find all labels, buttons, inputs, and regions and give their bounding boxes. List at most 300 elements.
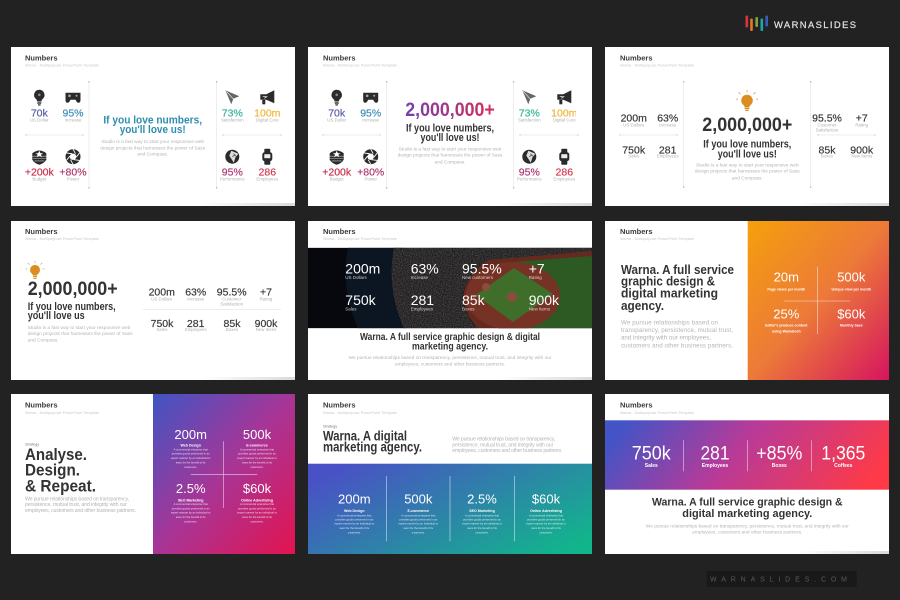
slide 6 headline: graphic design &	[621, 274, 715, 289]
slide 7 headline: Analyse.	[25, 445, 87, 464]
slide 3 title: Numbers	[620, 54, 653, 63]
footer url badge: WARNASLIDES.COM	[710, 576, 847, 584]
slide 3 body text: and Compass.	[732, 175, 763, 181]
service: E-commerce: provides goods performed in an	[238, 452, 276, 456]
slide 4 headline: If you love numbers,	[28, 301, 116, 313]
stat: 95% performance: 95%	[222, 167, 243, 179]
stat: 900k: 900k	[850, 144, 874, 156]
stat: 750k: 750k	[345, 292, 377, 308]
stat: 500k: Unique view per month	[832, 288, 871, 292]
stat: +85%: +85%	[756, 444, 802, 465]
slide 2: icon stats with gradient number	[308, 47, 592, 206]
strategy kicker: Strategy	[323, 425, 337, 429]
stat: 286: 286	[259, 167, 276, 179]
slide 4 subtitle: Warna - Multipurpose PowerPoint Template	[25, 237, 99, 241]
service: Online Advertising: $60k	[243, 481, 272, 496]
slide 2 body text	[398, 147, 503, 165]
slide 8 body text: We pursue relationships based on transparency,	[452, 436, 555, 442]
service: SEO Marketing: SEO Marketing	[469, 509, 495, 513]
stat: 95% performance: 95%	[519, 167, 540, 179]
slide 6 headline	[621, 262, 734, 313]
slide 8 title: Numbers	[323, 401, 356, 410]
slide 9 headline	[652, 496, 843, 520]
service: E-commerce: provides goods performed in an	[399, 518, 438, 522]
stat: 95%: 95%	[360, 108, 381, 120]
slide 5 title: Numbers	[323, 227, 356, 236]
slide 2 body text: Studio is a fast way to start your responsive web	[399, 147, 502, 153]
stat: 85k: Boxes	[821, 153, 834, 158]
stat: $60k: Monthly base	[840, 323, 863, 327]
stat: 20m: 20m	[774, 270, 799, 285]
service: Online Advertising: customers.	[539, 530, 553, 534]
stat: +80%	[59, 149, 87, 182]
red gradient band	[605, 420, 889, 490]
slide 9 body text: employees, customers and other business partners.	[692, 529, 802, 535]
slide 7 headline: Design.	[25, 461, 80, 480]
slide 3 body text: Studio is a fast way to start your responsive web	[696, 163, 799, 169]
stat: +200k: Budget	[32, 177, 47, 182]
service: E-commerce: team for the benefit of its	[404, 526, 434, 530]
slide 4 body text: Studio is a fast way to start your responsive web	[28, 325, 131, 331]
stat: 286	[256, 149, 279, 182]
slide 6 subtitle: Warna - Multipurpose PowerPoint Template	[620, 237, 694, 241]
service: E-commerce: team for the benefit of its	[242, 460, 272, 464]
slide 1 dividers	[26, 81, 282, 188]
stadium photo	[308, 248, 592, 330]
slide 2 dividers	[322, 81, 578, 188]
slide 2 body text: design projects that harnesses the power of Sass	[398, 153, 503, 159]
service: E-commerce: expert manner by an individual or	[398, 522, 438, 526]
service: SEO Marketing: team for the benefit of its	[467, 526, 497, 530]
stat: 95.5%: Customer	[817, 122, 837, 127]
service: E-commerce: E-commerce	[408, 509, 429, 513]
service: Web Design: team for the benefit of its	[340, 526, 370, 530]
slide 3 headline: If you love numbers,	[703, 139, 791, 151]
stat: 200m: 200m	[621, 113, 647, 125]
service: SEO Marketing: SEO Marketing	[178, 498, 203, 502]
stat: 85k: 85k	[462, 292, 486, 308]
stat: 281	[657, 144, 679, 158]
brand logo	[746, 16, 856, 31]
service: SEO Marketing: customers.	[184, 520, 198, 524]
slide 5 body text: We pursue relationships based on transparency, persistence, mutual trust, and integrity with our	[348, 355, 552, 361]
stat: 95% performance: Performance	[517, 177, 542, 182]
service: E-commerce: A commercial enterprise that	[240, 448, 274, 452]
slide 7 body text	[25, 496, 136, 514]
stat: 1,365: Coffees	[834, 463, 853, 469]
slide 8 body text: persistence, mutual trust, and integrity with our	[452, 442, 554, 448]
service: E-commerce: 500k	[404, 492, 433, 507]
purple gradient panel	[153, 394, 295, 554]
service: SEO Marketing: 2.5%	[176, 481, 206, 496]
slide 9 subtitle: Warna - Multipurpose PowerPoint Template	[620, 411, 694, 415]
service: Web Design: team for the benefit of its	[176, 460, 206, 464]
stat: 70k: 70k	[31, 108, 49, 120]
stat: 500k	[832, 270, 871, 292]
stat: +200k: +200k	[25, 167, 54, 179]
stat: 70k: US Dollar	[30, 118, 49, 123]
stat: 100m	[254, 90, 281, 123]
stat: 286: 286	[556, 167, 573, 179]
panel cross dividers	[191, 441, 257, 508]
stat: 20m	[767, 270, 805, 292]
slide 5 body text: employees, customers and other business partners.	[395, 362, 505, 368]
stat: 63%: Increase	[411, 275, 428, 280]
slide 2 headline: you'll love us!	[420, 132, 480, 144]
stat: 900k: New Items	[529, 307, 551, 312]
service: Online Advertising: team for the benefit of its	[531, 526, 561, 530]
slide 5 subtitle: Warna - Multipurpose PowerPoint Template	[323, 237, 397, 241]
teal gradient band	[308, 464, 592, 554]
service: Online Advertising: team for the benefit of its	[242, 515, 272, 519]
service: E-commerce: E-commerce	[246, 444, 268, 448]
service: Online Advertising	[237, 481, 277, 524]
stat: 73%	[518, 90, 541, 123]
big dark number: 2,000,000+	[702, 115, 792, 136]
service: SEO Marketing: provides goods performed in an	[172, 506, 210, 510]
service: SEO Marketing: expert manner by an individual or	[171, 511, 211, 515]
service: SEO Marketing: A commercial enterprise that	[465, 514, 499, 518]
slide 5: stadium photo band	[308, 221, 592, 380]
big gradient number: 2,000,000+	[405, 100, 495, 121]
stat: 100m: 100m	[254, 108, 281, 120]
stat: 750k: 750k	[151, 318, 174, 330]
slide 8 body text	[452, 436, 562, 454]
stat: 500k: 500k	[837, 270, 866, 285]
band dividers	[386, 476, 514, 541]
stat: +80%	[357, 149, 384, 182]
slide 4 title: Numbers	[25, 227, 58, 236]
stat: 100m: Digital Core	[256, 118, 279, 123]
slide 1 body text: and Compass.	[137, 152, 168, 158]
slide 1 subtitle: Warna - Multipurpose PowerPoint Template	[25, 64, 99, 68]
stat: 73%: 73%	[519, 108, 540, 120]
slide 2 subtitle: Warna - Multipurpose PowerPoint Template	[323, 64, 397, 68]
stat: 281: Employees	[411, 307, 434, 312]
slide 7 headline	[25, 445, 96, 495]
slide 6: orange gradient panel	[605, 221, 889, 380]
slide 2 headline	[406, 123, 494, 144]
stat: +7: +7	[260, 286, 272, 298]
stat: 95%: Increase	[362, 118, 380, 123]
slide 8 body text: employees, customers and other business partners.	[452, 448, 562, 454]
slide 8 subtitle: Warna - Multipurpose PowerPoint Template	[323, 411, 397, 415]
stat: 100m: 100m	[551, 108, 578, 120]
slide 7 body text: We pursue relationships based on transparency,	[25, 496, 129, 502]
stat: 70k: 70k	[328, 108, 346, 120]
service: SEO Marketing: provides goods performed in an	[463, 518, 501, 522]
slide 6 body text: customers and other business partners.	[621, 342, 733, 349]
slide 2 title: Numbers	[323, 54, 356, 63]
icon: orange light bulb	[26, 261, 44, 279]
stat: +80%: Power	[364, 177, 377, 182]
slide 7 body text: employees, customers and other business partners.	[25, 508, 136, 514]
slide 4 body text	[28, 325, 133, 343]
stat: 73%	[221, 90, 244, 123]
stat: +80%: +80%	[357, 167, 384, 179]
service: Online Advertising: $60k	[532, 492, 561, 507]
slide 4 headline	[28, 301, 116, 322]
slide 6 headline: Warna. A full service	[621, 262, 734, 277]
stat: 95.5%: 95.5%	[462, 260, 502, 276]
stat: 95%	[62, 93, 84, 123]
slide 8: teal gradient band	[308, 394, 592, 554]
stat: 95.5%	[812, 113, 842, 132]
stat: +200k: Budget	[330, 177, 344, 182]
service: E-commerce: 500k	[243, 427, 272, 442]
footer url badge	[707, 571, 857, 587]
slide 2 headline: If you love numbers,	[406, 123, 494, 135]
icon: orange light bulb	[736, 90, 758, 111]
slide 6 body text: and integrity with our employees,	[621, 335, 711, 342]
stat: 750k: Sales	[628, 153, 640, 158]
service: Web Design: A commercial enterprise that	[174, 448, 208, 452]
slide 5 body text	[348, 355, 552, 368]
service: SEO Marketing: team for the benefit of its	[176, 515, 206, 519]
service: Web Design: provides goods performed in an	[172, 452, 210, 456]
stat: +80%: +80%	[59, 167, 87, 179]
slide 6 title: Numbers	[620, 227, 653, 236]
stat: 73%: 73%	[222, 108, 243, 120]
stat: 63%: 63%	[411, 260, 439, 276]
service: Online Advertising: A commercial enterprise that	[240, 502, 274, 506]
stat: 25%: Editor's produce content	[765, 323, 808, 327]
service: Web Design: provides goods performed in an	[335, 518, 374, 522]
stat: 25%: 25%	[773, 306, 800, 321]
slide 1 headline: you'll love us!	[120, 124, 186, 136]
slide 3 subtitle: Warna - Multipurpose PowerPoint Template	[620, 64, 694, 68]
service: Web Design: Web Design	[344, 509, 365, 513]
stat: 281: 281	[411, 292, 434, 308]
stat: 63%: Increase	[659, 122, 677, 127]
stat: 200m: US Dollars	[623, 122, 645, 127]
stat: 281	[185, 318, 207, 332]
stat: 95%: 95%	[62, 108, 84, 120]
slide 8 headline	[323, 428, 422, 454]
stat: 70k: US Dollar	[327, 118, 347, 123]
slide 4 body text: and Compass.	[28, 337, 59, 343]
stat: +7: Rating	[260, 296, 273, 301]
orange gradient panel	[748, 221, 889, 380]
stat: 281: 281	[187, 318, 205, 330]
service: Web Design: 200m	[174, 427, 207, 442]
slide 7 body text: persistence, mutual trust, and integrity with our	[25, 502, 127, 508]
stat: +85%: Boxes	[772, 463, 787, 469]
stat: 85k: Boxes	[462, 307, 475, 312]
stat: 281: 281	[659, 144, 677, 156]
slide 7 subtitle: Warna - Multipurpose PowerPoint Template	[25, 411, 99, 415]
stat: $60k: $60k	[837, 306, 866, 321]
stat: 200m: US Dollars	[151, 296, 173, 301]
stat: 281: Employees	[185, 327, 207, 332]
slide 1: icon stats with teal headline	[11, 47, 295, 206]
slide 3 body text	[695, 163, 800, 181]
stat: 25%	[765, 306, 808, 333]
stat: 85k: 85k	[819, 144, 836, 156]
strategy kicker: Strategy	[25, 442, 39, 446]
slide 9: red gradient band	[605, 394, 889, 554]
service: SEO Marketing: A commercial enterprise that	[174, 502, 208, 506]
service: E-commerce	[237, 427, 277, 469]
stat: 750k: 750k	[632, 444, 671, 465]
slide 6 body text: We pursue relationships based on	[621, 319, 719, 326]
stat: 63%: 63%	[657, 113, 678, 125]
stat: 750k: Sales	[645, 463, 658, 469]
stat: +7: Rating	[855, 122, 869, 127]
service: Online Advertising: Online Advertising	[241, 498, 273, 502]
stat: 750k: Sales	[157, 327, 168, 332]
stat: 200m: 200m	[345, 260, 380, 276]
stat: 95% performance	[220, 150, 245, 182]
stat: 85k: Boxes	[226, 327, 239, 332]
stat: 900k: New Items	[256, 327, 277, 332]
stat: 95.5%: Satisfaction	[816, 127, 839, 132]
stat: 95.5%: 95.5%	[217, 286, 247, 298]
stat: 95.5%: New customers	[462, 275, 494, 280]
service: E-commerce: expert manner by an individual or	[237, 456, 277, 460]
stat: 750k: 750k	[622, 144, 646, 156]
stat: 95.5%: Customer	[222, 296, 242, 301]
stat: +200k	[322, 150, 352, 182]
stat: 73%: Satisfaction	[518, 118, 541, 123]
service: SEO Marketing	[462, 492, 502, 534]
stat: 750k: Sales	[345, 307, 357, 312]
slide 3 dividers	[620, 81, 876, 188]
stat: 900k: New Items	[851, 153, 873, 158]
service: E-commerce	[398, 492, 438, 534]
brand logo: WARNASLIDES	[774, 19, 856, 30]
slide 7 headline: & Repeat.	[25, 476, 96, 495]
slide 3 body text: design projects that harnesses the power of Sass	[695, 169, 800, 175]
band dividers	[683, 440, 811, 471]
stat: 281: Employees	[702, 463, 728, 469]
slide 9 body text	[646, 523, 849, 535]
stat: +7: +7	[529, 260, 545, 276]
service: E-commerce: customers.	[250, 465, 264, 469]
stat: 95%: Increase	[65, 118, 82, 123]
panel cross dividers	[784, 267, 850, 334]
slide 7: purple gradient panel	[11, 394, 295, 554]
service: Web Design: A commercial enterprise that	[337, 514, 372, 518]
slide 4 body text: design projects that harnesses the power of Sass	[28, 331, 133, 337]
stat: 70k	[30, 90, 49, 123]
stat: +200k	[25, 150, 54, 182]
stat: 95.5%	[217, 286, 247, 306]
slide 1 headline: If you love numbers,	[103, 114, 202, 126]
stat: 286	[553, 149, 576, 182]
stat: +200k: +200k	[322, 167, 352, 179]
stat: 100m	[551, 90, 578, 123]
stat: 100m: Digital Core	[553, 118, 576, 123]
slide 9 headline: Warna. A full service graphic design &	[652, 496, 843, 508]
stat: 200m: US Dollars	[345, 275, 368, 280]
service: Online Advertising: expert manner by an individual or	[526, 522, 566, 526]
stat: 63%: Increase	[187, 296, 205, 301]
stat: +80%: Power	[67, 177, 80, 182]
slide 9 body text: We pursue relationships based on transparency, persistence, mutual trust, and integrity with our	[646, 523, 849, 529]
stat: 286: Employees	[553, 177, 576, 182]
slide 1 headline	[103, 114, 202, 136]
stat: 900k: 900k	[529, 292, 560, 308]
stat: 95.5%: Satisfaction	[220, 301, 244, 306]
slide 9 headline: digital marketing agency.	[682, 508, 812, 520]
slide 6 body text: transparency, persistence, mutual trust,	[621, 327, 733, 334]
slide 6 headline: digital marketing	[621, 286, 718, 301]
slide 6 headline: agency.	[621, 298, 664, 313]
stat: 95% performance: Performance	[220, 177, 245, 182]
stat: 73%: Satisfaction	[221, 118, 244, 123]
slide 3 headline	[703, 139, 791, 160]
stat: 95%	[360, 93, 381, 123]
slide 3: centered bulb and number stats	[605, 47, 889, 206]
slide 5 headline	[360, 332, 540, 352]
slide 9 title: Numbers	[620, 401, 653, 410]
slide 7 title: Numbers	[25, 401, 58, 410]
stat: 63%: 63%	[185, 286, 206, 298]
slide 3 headline: you'll love us!	[718, 148, 777, 160]
stat: 95% performance	[517, 150, 542, 182]
stat: 25%: using Warnatech	[772, 329, 801, 333]
slide 8 headline: marketing agency.	[323, 438, 422, 454]
big dark number: 2,000,000+	[28, 279, 118, 300]
service: Web Design: expert manner by an individual or	[171, 456, 211, 460]
service: Web Design: customers.	[348, 530, 361, 534]
stat: 70k	[327, 90, 347, 123]
slide 1 body text	[100, 139, 206, 158]
stat: 281: Employees	[657, 153, 679, 158]
service: SEO Marketing: expert manner by an individual or	[462, 522, 502, 526]
slide 1 title: Numbers	[25, 54, 58, 63]
service: Online Advertising: Online Advertising	[530, 509, 562, 513]
service: Online Advertising	[526, 492, 566, 534]
service: Online Advertising: A commercial enterprise that	[529, 514, 563, 518]
slide 4: left number with stat row	[11, 221, 295, 380]
service: Web Design: customers.	[184, 465, 198, 469]
stat: +7: Rating	[529, 275, 542, 280]
service: Web Design: 200m	[338, 492, 371, 507]
slide 6 body text	[621, 319, 733, 349]
stat: +7: +7	[856, 113, 868, 125]
service: Web Design: expert manner by an individual or	[334, 522, 374, 526]
stat: 900k: 900k	[255, 318, 278, 330]
slide 4 headline: you'll love us	[28, 310, 85, 322]
stat: 95.5%: 95.5%	[812, 113, 842, 125]
slide 8 headline: Warna. A digital	[323, 428, 407, 444]
stat: 20m: Page views per month	[767, 288, 805, 292]
service: Online Advertising: provides goods performed in an	[527, 518, 565, 522]
slide 2 body text: and Compass.	[435, 159, 465, 165]
service: Web Design: Web Design	[180, 444, 201, 448]
service: Online Advertising: expert manner by an individual or	[237, 511, 277, 515]
stat: 281: 281	[700, 444, 730, 465]
service: Web Design	[171, 427, 211, 469]
service: SEO Marketing: 2.5%	[467, 492, 497, 507]
stat: 85k: 85k	[224, 318, 241, 330]
stat: 1,365: 1,365	[821, 444, 865, 465]
service: Online Advertising: provides goods performed in an	[238, 506, 276, 510]
slide 1 body text: Studio is a fast way to start your responsive web	[101, 139, 204, 145]
service: Online Advertising: customers.	[250, 520, 264, 524]
stat: 200m: 200m	[149, 286, 175, 298]
service: Web Design	[334, 492, 374, 534]
stat: 286: Employees	[256, 177, 279, 182]
slide 4 divider	[143, 309, 281, 311]
service: E-commerce: A commercial enterprise that	[401, 514, 436, 518]
service: SEO Marketing	[171, 481, 211, 524]
slide 5 headline: marketing agency.	[412, 341, 488, 352]
slide 1 body text: design projects that harnesses the power of Sass	[100, 145, 206, 151]
service: E-commerce: customers.	[412, 530, 425, 534]
